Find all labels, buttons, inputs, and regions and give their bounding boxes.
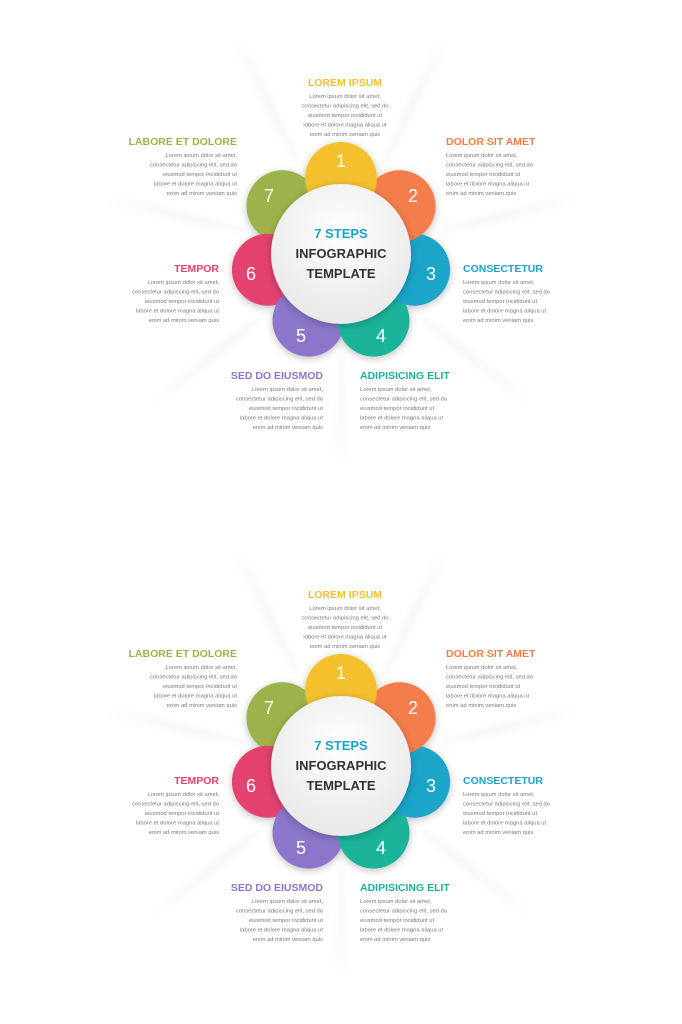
step 2 text: Lorem ipsum dolor sit amet, — [446, 665, 518, 671]
step 7 text: LABORE ET DOLORE — [128, 136, 237, 148]
step 6 text: labore et dolore magna aliqua ut — [136, 820, 219, 826]
step 5 text: enim ad minim veniam quis — [253, 937, 323, 943]
step 6 text: consectetur adipiscing elit, sed do — [132, 290, 219, 296]
step 7 text: consectetur adipiscing elit, sed do — [150, 162, 237, 168]
step 3 text: eiusmod tempor incididunt ut — [463, 811, 538, 817]
step 3 text: consectetur adipiscing elit, sed do — [463, 802, 550, 808]
step 2 text: DOLOR SIT AMET — [446, 648, 536, 660]
step 1 text: enim ad minim veniam quis — [310, 132, 380, 138]
step 7 text: labore et dolore magna aliqua ut — [154, 182, 237, 188]
center circle — [271, 696, 411, 836]
step 7 text: Lorem ipsum dolor sit amet, — [165, 665, 237, 671]
step 6 text: enim ad minim veniam quis — [149, 318, 219, 324]
step numbers: 1 — [336, 663, 346, 683]
infographic copy 2 — [95, 536, 587, 985]
step 3 text: Lorem ipsum dolor sit amet, — [463, 280, 535, 286]
step 3 text: Lorem ipsum dolor sit amet, — [463, 792, 535, 798]
step 3 text: CONSECTETUR — [463, 775, 543, 787]
step 5 text — [231, 882, 323, 943]
step 4 text: Lorem ipsum dolor sit amet, — [360, 387, 432, 393]
step 3 text: labore et dolore magna aliqua ut — [463, 308, 547, 314]
step 1 text: LOREM IPSUM — [308, 77, 382, 89]
shadow rays — [95, 24, 587, 473]
step 5 text: eiusmod tempor incididunt ut — [249, 918, 323, 924]
step 3 text: consectetur adipiscing elit, sed do — [463, 290, 550, 296]
step 7 text — [128, 648, 237, 709]
step 1 text: eiusmod tempor incididunt ut — [308, 113, 382, 119]
step 4 text — [360, 882, 450, 943]
step 6 text: eiusmod tempor incididunt ut — [145, 299, 219, 305]
step 4 text: labore et dolore magna aliqua ut — [360, 928, 444, 934]
step 3 text: CONSECTETUR — [463, 263, 543, 275]
step 1 text — [301, 77, 389, 138]
step 2 text: eiusmod tempor incididunt ut — [446, 172, 521, 178]
step 2 text: Lorem ipsum dolor sit amet, — [446, 153, 518, 159]
step 6 text: Lorem ipsum dolor sit amet, — [147, 280, 219, 286]
step numbers: 6 — [246, 264, 256, 284]
step 1 text: consectetur adipiscing elit, sed do — [301, 104, 389, 110]
step 6 text — [132, 263, 219, 324]
step 7 text — [128, 136, 237, 197]
step 7 text: eiusmod tempor incididunt ut — [163, 172, 237, 178]
step 7 text: enim ad minim veniam quis — [167, 191, 237, 197]
step 2 text — [446, 136, 536, 197]
infographic copy 1 — [95, 24, 587, 473]
step 1 text — [301, 589, 389, 650]
step 4 text: Lorem ipsum dolor sit amet, — [360, 899, 432, 905]
step 4 text: enim ad minim veniam quis — [360, 937, 430, 943]
step numbers: 3 — [426, 264, 436, 284]
step 2 text: enim ad minim veniam quis — [446, 191, 516, 197]
center circle: 7 STEPS — [314, 738, 368, 753]
step 5 text: consectetur adipiscing elit, sed do — [236, 396, 323, 402]
step 4 text — [360, 370, 450, 431]
step numbers: 5 — [296, 326, 306, 346]
step 2 text: DOLOR SIT AMET — [446, 136, 536, 148]
step numbers: 4 — [376, 838, 386, 858]
step 5 text: consectetur adipiscing elit, sed do — [236, 908, 323, 914]
step 6 text: labore et dolore magna aliqua ut — [136, 308, 219, 314]
step numbers: 1 — [336, 151, 346, 171]
step 2 text: labore et dolore magna aliqua ut — [446, 182, 530, 188]
step 3 text — [463, 775, 550, 836]
center circle: TEMPLATE — [306, 778, 376, 793]
step numbers: 7 — [264, 186, 274, 206]
step numbers — [246, 151, 436, 346]
step 1 text: enim ad minim veniam quis — [310, 644, 380, 650]
step 6 text — [132, 775, 219, 836]
center circle: 7 STEPS — [314, 226, 368, 241]
step 5 text: Lorem ipsum dolor sit amet, — [251, 387, 323, 393]
step 1 text: consectetur adipiscing elit, sed do — [301, 616, 389, 622]
step 7 text: Lorem ipsum dolor sit amet, — [165, 153, 237, 159]
step 4 text: ADIPISICING ELIT — [360, 370, 450, 382]
step 5 text — [231, 370, 323, 431]
step 1 text: Lorem ipsum dolor sit amet, — [309, 94, 381, 100]
center circle: INFOGRAPHIC — [296, 758, 387, 773]
step 7 text: enim ad minim veniam quis — [167, 703, 237, 709]
step numbers: 4 — [376, 326, 386, 346]
step 5 text: SED DO EIUSMOD — [231, 370, 323, 382]
shadow rays — [95, 536, 587, 985]
step 1 text: eiusmod tempor incididunt ut — [308, 625, 382, 631]
step 4 text: enim ad minim veniam quis — [360, 425, 430, 431]
step 5 text: enim ad minim veniam quis — [253, 425, 323, 431]
step 6 text: consectetur adipiscing elit, sed do — [132, 802, 219, 808]
step numbers — [246, 663, 436, 858]
petals — [232, 142, 450, 357]
step 1 text: labore et dolore magna aliqua ut — [303, 122, 387, 128]
step numbers: 6 — [246, 776, 256, 796]
step 3 text: enim ad minim veniam quis — [463, 830, 533, 836]
petals — [232, 654, 450, 869]
step 6 text: TEMPOR — [174, 775, 219, 787]
step 4 text: eiusmod tempor incididunt ut — [360, 918, 435, 924]
step numbers: 2 — [408, 186, 418, 206]
step 1 text: labore et dolore magna aliqua ut — [303, 634, 387, 640]
step 4 text: consectetur adipiscing elit, sed do — [360, 908, 447, 914]
step 4 text: eiusmod tempor incididunt ut — [360, 406, 435, 412]
step numbers: 5 — [296, 838, 306, 858]
step 6 text: Lorem ipsum dolor sit amet, — [147, 792, 219, 798]
step 2 text: labore et dolore magna aliqua ut — [446, 694, 530, 700]
step numbers: 2 — [408, 698, 418, 718]
step 2 text: consectetur adipiscing elit, sed do — [446, 162, 533, 168]
step 3 text: eiusmod tempor incididunt ut — [463, 299, 538, 305]
step 5 text: labore et dolore magna aliqua ut — [240, 416, 323, 422]
step 7 text: LABORE ET DOLORE — [128, 648, 237, 660]
step 6 text: eiusmod tempor incididunt ut — [145, 811, 219, 817]
step 5 text: Lorem ipsum dolor sit amet, — [251, 899, 323, 905]
step numbers: 7 — [264, 698, 274, 718]
step 7 text: eiusmod tempor incididunt ut — [163, 684, 237, 690]
step 6 text: TEMPOR — [174, 263, 219, 275]
step 2 text: consectetur adipiscing elit, sed do — [446, 674, 533, 680]
step 2 text: enim ad minim veniam quis — [446, 703, 516, 709]
center circle: TEMPLATE — [306, 266, 376, 281]
step 5 text: eiusmod tempor incididunt ut — [249, 406, 323, 412]
step 5 text: labore et dolore magna aliqua ut — [240, 928, 323, 934]
center circle — [271, 184, 411, 324]
step 1 text: LOREM IPSUM — [308, 589, 382, 601]
step 1 text: Lorem ipsum dolor sit amet, — [309, 606, 381, 612]
step 5 text: SED DO EIUSMOD — [231, 882, 323, 894]
center circle: INFOGRAPHIC — [296, 246, 387, 261]
step 4 text: labore et dolore magna aliqua ut — [360, 416, 444, 422]
step numbers: 3 — [426, 776, 436, 796]
step 2 text — [446, 648, 536, 709]
step 2 text: eiusmod tempor incididunt ut — [446, 684, 521, 690]
step 7 text: labore et dolore magna aliqua ut — [154, 694, 237, 700]
step 3 text: enim ad minim veniam quis — [463, 318, 533, 324]
step 3 text — [463, 263, 550, 324]
step 7 text: consectetur adipiscing elit, sed do — [150, 674, 237, 680]
step 4 text: consectetur adipiscing elit, sed do — [360, 396, 447, 402]
step 4 text: ADIPISICING ELIT — [360, 882, 450, 894]
step 6 text: enim ad minim veniam quis — [149, 830, 219, 836]
step 3 text: labore et dolore magna aliqua ut — [463, 820, 547, 826]
